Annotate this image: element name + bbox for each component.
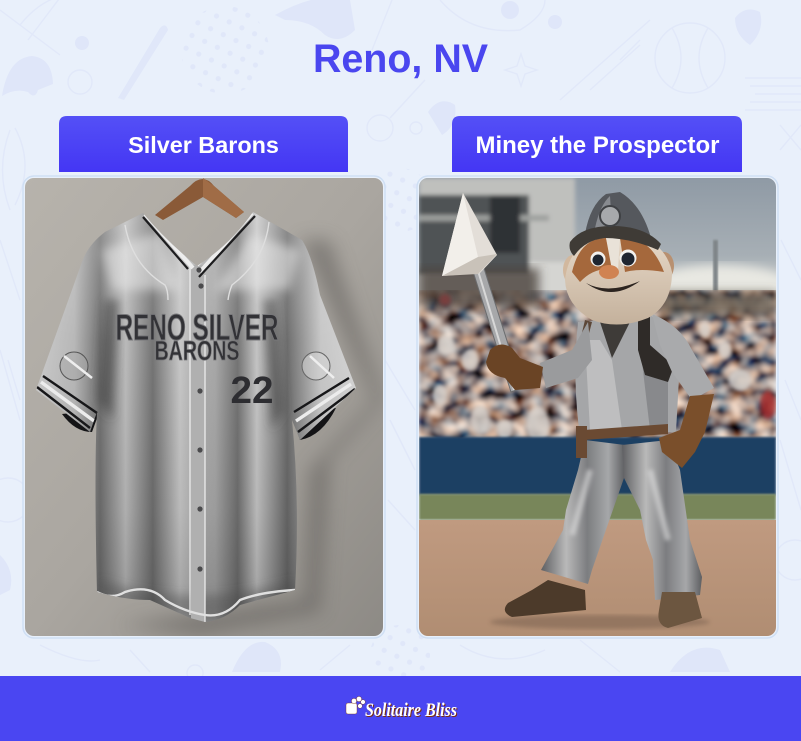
bottom hem xyxy=(97,589,295,615)
eyes xyxy=(590,250,636,266)
undershirt xyxy=(600,322,630,358)
wall backdrop xyxy=(25,178,383,636)
placket xyxy=(191,265,205,622)
jersey lettering: 22 xyxy=(230,370,274,412)
footer logo: SolitaireBliss xyxy=(346,696,458,722)
collar trim xyxy=(145,213,252,272)
jersey cast shadow xyxy=(120,240,383,636)
smile xyxy=(586,281,640,292)
helmet xyxy=(585,192,651,238)
banner: Silver Barons xyxy=(59,116,348,172)
footer logo: SolitaireBliss: Solitaire Bliss xyxy=(366,702,458,722)
inner collar xyxy=(160,222,240,266)
arms xyxy=(540,322,592,388)
sleeve underside dark xyxy=(62,408,336,440)
sleeve logos xyxy=(60,352,92,380)
torso xyxy=(575,315,680,436)
nose xyxy=(599,265,619,279)
yoke seams xyxy=(125,222,269,300)
infield dirt xyxy=(419,520,776,638)
buttons xyxy=(196,267,204,572)
spear pole xyxy=(474,268,518,392)
light pole xyxy=(713,240,718,300)
head xyxy=(563,255,573,279)
sky xyxy=(419,178,776,308)
footer logo: SolitaireBliss: Solitaire Bliss xyxy=(365,701,457,721)
banner: Miney the Prospector xyxy=(452,116,742,172)
crowd xyxy=(419,290,776,440)
spear head xyxy=(442,193,497,276)
outfield wall xyxy=(419,437,776,495)
straps xyxy=(582,320,592,334)
sleeve stripes xyxy=(37,376,97,428)
footer bar xyxy=(0,676,801,741)
mascot xyxy=(442,192,714,628)
banner: Miney the Prospector: Miney the Prospector xyxy=(475,132,720,159)
panel: Miney the Prospector mascot photo xyxy=(417,176,790,638)
brown face mask xyxy=(572,238,664,282)
gloves xyxy=(486,344,543,390)
belt xyxy=(584,424,668,440)
title: Reno, NV xyxy=(313,37,488,81)
panel: Silver Barons jersey photo xyxy=(23,176,385,640)
jersey xyxy=(36,212,356,622)
logo flower mark xyxy=(346,696,365,714)
jersey lettering xyxy=(117,314,278,403)
jersey lettering: RENO SILVER xyxy=(116,307,278,348)
legs xyxy=(541,440,625,584)
stadium building xyxy=(419,178,575,323)
banner: Silver Barons: Silver Barons xyxy=(128,132,279,158)
hanger xyxy=(155,178,244,220)
jersey lettering: BARONS xyxy=(154,335,240,366)
mascot ground shadow xyxy=(490,615,710,629)
boots xyxy=(505,580,586,617)
